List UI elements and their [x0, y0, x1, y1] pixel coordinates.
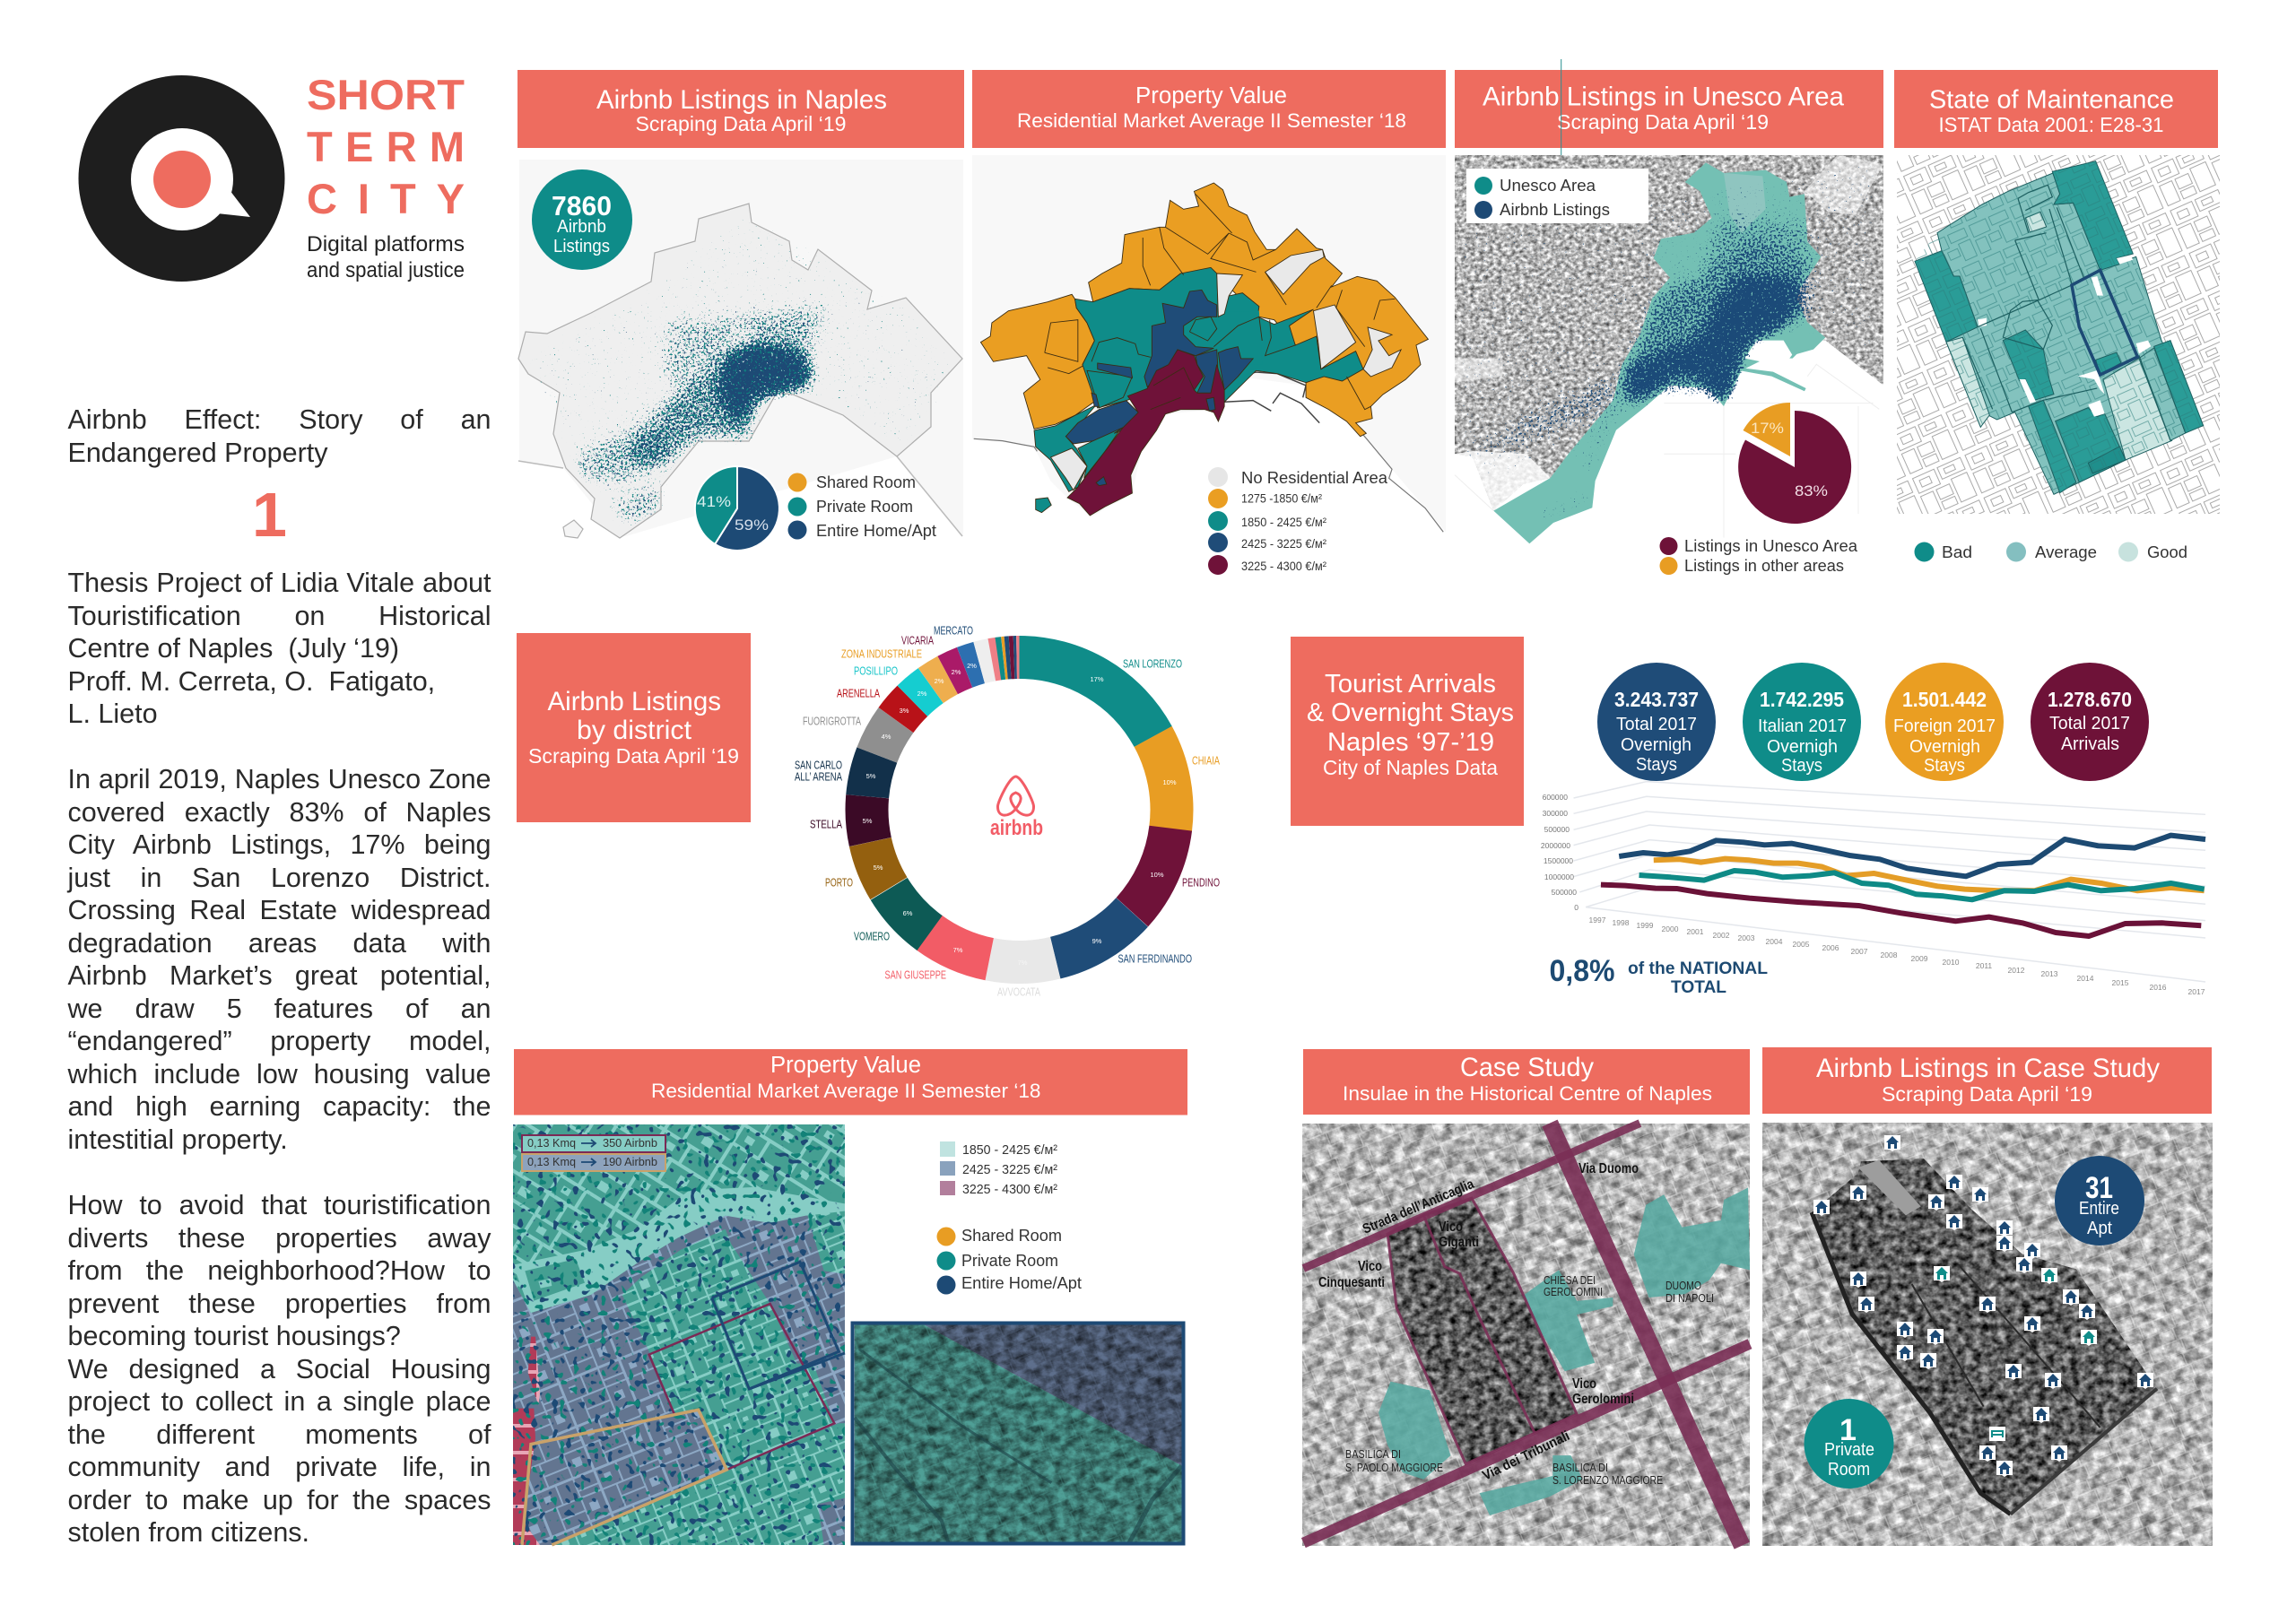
text block: research questions and project: stolen from citizens. [68, 1517, 309, 1548]
burgundy street overlays [1303, 1124, 1750, 1546]
donut percentages: 4% [882, 733, 891, 741]
icons: entire apartment markers [1813, 1135, 2153, 1477]
district boundary lines [1045, 195, 1395, 410]
legend box: Unesco area and Airbnb listings: Airbnb Listings [1500, 201, 1610, 219]
logo wordmark: Short Term City: CITY [307, 175, 465, 222]
panel header: Tourist Arrivals and Overnight Stays: City of Naples Data [1323, 756, 1498, 779]
panel header: Airbnb Listings in Naples: Airbnb Listings in Naples [596, 85, 887, 115]
donut district labels: STELLA [810, 818, 842, 830]
stat circle: Italian overnight stays: 1.742.295 [1760, 688, 1844, 711]
street names: Vico [1439, 1219, 1463, 1235]
donut percentages: 3% [900, 707, 909, 715]
map: state of maintenance [1897, 155, 2220, 561]
panel header: Airbnb Listings in Naples [517, 70, 964, 148]
donut percentages: 5% [866, 772, 876, 780]
legend: value bands: 3225 - 4300 €/м² [962, 1182, 1057, 1197]
chart x-axis years: 2012 [2008, 966, 2025, 975]
stat circle: Italian overnight stays: Overnigh [1767, 736, 1838, 757]
monument names: GEROLOMINI [1544, 1285, 1603, 1298]
density callouts: 350 Airbnb [603, 1137, 657, 1150]
pie chart: room types: 41% [697, 493, 731, 510]
legend: listings share: Listings in other areas [1684, 557, 1844, 575]
text block: research questions and project: becoming tourist housings? [68, 1321, 401, 1351]
street names [1318, 1161, 1639, 1484]
chart x-axis years: 2006 [1822, 943, 1839, 952]
panel header: Property Value: Residential Market Average II Semester ‘18 [1017, 109, 1406, 132]
donut percentages: 2% [952, 668, 961, 676]
donut percentages: 5% [874, 864, 883, 872]
chart x-axis years: 2011 [1976, 961, 1992, 970]
legend: value bands: 1850 - 2425 €/м² [962, 1142, 1057, 1158]
legend box: Unesco area and Airbnb listings: Unesco Area [1500, 177, 1596, 195]
street names: Cinquesanti [1318, 1275, 1385, 1290]
text block: research questions and project: order to make up for the spaces [68, 1485, 491, 1515]
inset: tinted aerial view [852, 1324, 1184, 1544]
panel header: Property Value detail: Residential Market Average II Semester ‘18 [651, 1080, 1040, 1102]
stat circle: 7860 listings: Airbnb [557, 217, 606, 237]
stat circle: 7860 listings [532, 169, 632, 270]
logo wordmark: Short Term City: SHORT [307, 71, 465, 118]
text block: thesis credits: Thesis Project of Lidia Vitale about [68, 568, 491, 598]
chart y-axis labels: 2000000 [1541, 841, 1570, 850]
callout: 0,8% of the national total [1550, 954, 1768, 997]
chart x-axis years: 2002 [1713, 931, 1730, 940]
panel header: Airbnb Listings by district [517, 633, 751, 822]
text block: project title: Endangered Property [68, 438, 327, 468]
stat circle: total arrivals: 1.278.670 [2048, 688, 2132, 711]
donut district labels: SAN GIUSEPPE [884, 968, 946, 981]
panel header: Tourist Arrivals and Overnight Stays: Tourist Arrivals [1325, 670, 1496, 699]
panel header: Airbnb Listings in Unesco Area: Airbnb Listings in Unesco Area [1483, 82, 1845, 111]
chart y-axis labels: 1000000 [1544, 872, 1574, 881]
text block: research questions and project: project to collect in a single place [68, 1386, 491, 1417]
legend: property value: 3225 - 4300 €/м² [1241, 560, 1326, 573]
chart x-axis years: 1998 [1613, 918, 1630, 927]
monument names: DI NAPOLI [1665, 1291, 1714, 1305]
logo wordmark: Short Term City: and spatial justice [307, 258, 465, 282]
street names: Giganti [1439, 1235, 1479, 1250]
pie chart: listings share [1738, 403, 1851, 524]
chart x-axis years: 2005 [1793, 940, 1810, 949]
callout: 0,8% of the national total: 0,8% [1550, 954, 1614, 988]
street names: Vico [1572, 1376, 1596, 1392]
monument names: BASILICA DI [1345, 1447, 1401, 1461]
donut district labels: VICARIA [901, 633, 934, 647]
text block: research questions and project: the different moments of [68, 1419, 491, 1449]
legend: maintenance state: Good [2147, 543, 2187, 561]
stat circle: 1 private room [1805, 1399, 1894, 1488]
donut percentages: 2% [967, 662, 977, 670]
text block: thesis credits: Touristification on Historical [68, 601, 491, 631]
donut percentages: 5% [863, 817, 873, 825]
donut percentages: 2% [918, 690, 927, 698]
scatter: navy entire home listings [518, 204, 962, 538]
panel header: Property Value [972, 70, 1446, 148]
callout: 0,8% of the national total: TOTAL [1671, 977, 1726, 997]
stat circle: foreign overnight stays: Foreign 2017 [1893, 716, 1996, 736]
panel header: Property Value: Property Value [1135, 83, 1287, 108]
text block: thesis credits: L. Lieto [68, 699, 158, 729]
chart x-axis years: 1997 [1589, 916, 1606, 924]
scatter: Airbnb listings density [1455, 155, 1883, 529]
donut percentages: 9% [1092, 937, 1102, 945]
chart x-axis years: 1999 [1637, 921, 1654, 930]
stat circle: foreign overnight stays: 1.501.442 [1902, 688, 1987, 711]
legend: property value: No Residential Area [1241, 469, 1388, 487]
chart x-axis years: 2014 [2077, 974, 2094, 983]
text block: thesis credits: Proff. M. Cerreta, O. Fatigato, [68, 665, 435, 696]
panel header: State of Maintenance: ISTAT Data 2001: E28-31 [1939, 113, 2163, 136]
chart x-axis years: 2009 [1911, 954, 1928, 963]
icon: airbnb logo: airbnb [990, 816, 1043, 840]
map: property value by zone [972, 155, 1446, 575]
chart y-axis labels: 500000 [1544, 825, 1570, 834]
stat circle: foreign overnight stays: Stays [1924, 755, 1965, 776]
donut district labels: MERCATO [934, 624, 973, 637]
donut district labels: SAN FERDINANDO [1118, 952, 1192, 965]
panel header: Airbnb Listings in Case Study: Scraping Data April ‘19 [1882, 1082, 2092, 1106]
chart y-axis labels: 0 [1574, 903, 1578, 912]
stat circle: total overnight stays: Stays [1636, 754, 1677, 775]
density callouts: 0,13 Kmq [527, 1156, 576, 1168]
legend: listings share [1659, 537, 1858, 575]
line chart: arrivals and overnight stays 1997-2017 [1541, 782, 2205, 996]
density callouts: 190 Airbnb [603, 1156, 657, 1168]
panel header: Airbnb Listings in Case Study [1762, 1047, 2212, 1114]
monument names: S. LORENZO MAGGIORE [1552, 1473, 1663, 1487]
density callouts [522, 1135, 665, 1171]
stat circle: 31 entire apartments: 31 [2085, 1171, 2113, 1205]
stat circle: foreign overnight stays: Overnigh [1909, 736, 1980, 757]
stat circle: 7860 listings: 7860 [552, 190, 612, 221]
panel header: Tourist Arrivals and Overnight Stays [1291, 637, 1524, 826]
text block: research questions and project [68, 1190, 491, 1548]
page number 1: 1 [252, 480, 287, 550]
donut district labels: SAN CARLO [795, 759, 842, 771]
donut percentages: 6% [903, 909, 913, 917]
callout: 0,8% of the national total: of the NATIONAL [1628, 959, 1768, 978]
chart x-axis years: 2015 [2112, 978, 2129, 987]
text block: research questions and project: community and private life, in [68, 1452, 491, 1482]
chart x-axis years: 2010 [1943, 958, 1960, 967]
legend: room types detail: Shared Room [961, 1227, 1062, 1245]
panel header: Airbnb Listings by district: by district [577, 716, 691, 745]
legend: room types detail: Entire Home/Apt [961, 1274, 1082, 1292]
donut district labels: SAN LORENZO [1123, 656, 1182, 671]
chart x-axis years: 2004 [1766, 937, 1783, 946]
teal monument buildings [1378, 1188, 1750, 1515]
logo wordmark: Short Term City: TERM [307, 123, 465, 170]
donut percentages: 2% [935, 677, 944, 685]
text block: research questions and project: diverts these properties away [68, 1223, 491, 1254]
map: listings in Unesco area [1455, 155, 1883, 575]
donut district labels: PORTO [825, 875, 853, 890]
map: detailed property value with listings [513, 1124, 845, 1545]
stat circle: total arrivals: Total 2017 [2049, 713, 2130, 733]
stat circle: total arrivals [2031, 663, 2149, 781]
legend: room types: Shared Room [816, 473, 916, 491]
map: Airbnb listings in Naples [518, 160, 963, 551]
text block: findings paragraph: Airbnb Market’s great potential, [68, 960, 491, 991]
legend: value bands: 2425 - 3225 €/м² [962, 1162, 1057, 1177]
stat circle: 1 private room: Private [1824, 1439, 1874, 1460]
chart x-axis years: 2008 [1881, 950, 1898, 959]
text block: findings paragraph: we draw 5 features of an [68, 994, 491, 1024]
donut percentages: 7% [953, 946, 963, 954]
text block: thesis credits: Centre of Naples (July ‘19) [68, 633, 399, 664]
donut district labels [795, 624, 1220, 999]
chart x-axis years: 2001 [1687, 927, 1704, 936]
monument names: BASILICA DI [1552, 1461, 1608, 1474]
donut district labels: PENDINO [1182, 875, 1220, 890]
donut district labels: ALL’ ARENA [795, 769, 842, 784]
chart x-axis years: 2000 [1662, 924, 1679, 933]
panel header: State of Maintenance: State of Maintenance [1929, 86, 2174, 115]
panel header: Airbnb Listings by district: Airbnb Listings [547, 687, 721, 716]
text block: findings paragraph: In april 2019, Naples Unesco Zone [68, 764, 491, 794]
panel header: Airbnb Listings in Naples: Scraping Data April ‘19 [635, 112, 847, 135]
donut percentages [863, 662, 1177, 967]
text block: findings paragraph: covered exactly 83% of Naples [68, 796, 491, 827]
pie chart: listings share: 83% [1795, 482, 1828, 499]
logo wordmark: Short Term City [307, 71, 465, 282]
text block: research questions and project: from the neighborhood?How to [68, 1255, 491, 1286]
legend: room types detail [936, 1227, 1082, 1295]
chart y-axis labels: 500000 [1552, 888, 1577, 897]
legend: property value: 2425 - 3225 €/м² [1241, 537, 1326, 551]
text block: findings paragraph: just in San Lorenzo District. [68, 863, 491, 893]
text block: project title: Airbnb Effect: Story of an [68, 404, 491, 435]
donut district labels: CHIAIA [1192, 753, 1220, 768]
stat circle: foreign overnight stays [1885, 663, 2004, 781]
donut district labels: AVVOCATA [997, 985, 1040, 999]
legend box: Unesco area and Airbnb listings [1466, 169, 1648, 223]
legend: maintenance state: Average [2035, 543, 2097, 561]
panel header: Case Study: Insulae in the Historical Centre of Naples [1343, 1082, 1712, 1105]
legend: property value [1208, 467, 1388, 575]
chart x-axis years: 2017 [2188, 987, 2205, 996]
stat circle: 31 entire apartments: Entire [2079, 1198, 2119, 1219]
stat circle: total overnight stays [1597, 663, 1716, 781]
stat circle: total overnight stays: 3.243.737 [1614, 688, 1699, 711]
text block: findings paragraph: City Airbnb Listings, 17% being [68, 829, 491, 860]
street names: Via Duomo [1578, 1161, 1639, 1176]
chart x-axis years: 2013 [2041, 969, 2058, 978]
text block: findings paragraph: and high earning capacity: the [68, 1091, 491, 1122]
chart x-axis years: 2016 [2150, 983, 2167, 992]
chart x-axis years: 2003 [1738, 933, 1755, 942]
chart y-axis labels: 300000 [1543, 809, 1568, 818]
panel header: Airbnb Listings in Unesco Area [1455, 70, 1883, 148]
study area outlines [522, 1262, 845, 1545]
text block: thesis credits [68, 568, 491, 729]
pie chart: room types: 59% [735, 516, 769, 534]
stat circle: total overnight stays: Overnigh [1621, 734, 1692, 755]
stat circle: 7860 listings: Listings [553, 237, 610, 256]
text block: findings paragraph: “endangered” property model, [68, 1026, 491, 1056]
panel header: State of Maintenance [1894, 70, 2218, 148]
text block: research questions and project: We designed a Social Housing [68, 1354, 491, 1384]
street names: Via dei Tribunali [1480, 1428, 1572, 1484]
donut percentages: 17% [1090, 675, 1104, 683]
chart x-axis years [1589, 916, 2205, 996]
panel header: Tourist Arrivals and Overnight Stays: & Overnight Stays [1307, 699, 1514, 727]
text block: project title [68, 404, 491, 468]
panel header: Airbnb Listings in Case Study: Airbnb Listings in Case Study [1816, 1054, 2160, 1083]
stat circle: 31 entire apartments: Apt [2087, 1218, 2112, 1238]
legend: room types [787, 473, 936, 540]
monument names: S. PAOLO MAGGIORE [1345, 1461, 1443, 1474]
panel header: Tourist Arrivals and Overnight Stays: Naples ‘97-’19 [1327, 728, 1494, 757]
text block: research questions and project: How to avoid that touristification [68, 1190, 491, 1220]
legend: room types: Entire Home/Apt [816, 522, 936, 540]
donut district labels: VOMERO [854, 929, 890, 943]
donut percentages: 10% [1150, 871, 1164, 879]
stat circle: Italian overnight stays: Italian 2017 [1758, 716, 1847, 736]
donut district labels: POSILLIPO [854, 664, 898, 678]
legend: property value: 1850 - 2425 €/м² [1241, 516, 1326, 529]
logo wordmark: Short Term City: Digital platforms [307, 232, 465, 256]
stat circle: total overnight stays: Total 2017 [1616, 714, 1697, 734]
legend: maintenance state: Bad [1942, 543, 1972, 561]
density callouts: 0,13 Kmq [527, 1137, 576, 1150]
donut district labels: FUORIGROTTA [803, 714, 861, 728]
stat circle: Italian overnight stays [1743, 663, 1861, 781]
panel header: Airbnb Listings by district: Scraping Data April ‘19 [528, 744, 739, 768]
logo: speech-bubble ring [79, 75, 285, 282]
donut district labels: ZONA INDUSTRIALE [841, 647, 922, 660]
panel header: Case Study: Case Study [1460, 1053, 1594, 1082]
stat circle: 1 private room: Room [1828, 1459, 1870, 1480]
icon: private room bed marker [1989, 1427, 2005, 1441]
monument names: CHIESA DEI [1544, 1273, 1596, 1287]
monument names [1345, 1273, 1714, 1487]
donut percentages: 7% [1018, 959, 1028, 967]
text block: findings paragraph: degradation areas data with [68, 927, 491, 958]
text block: findings paragraph: intestitial property. [68, 1124, 288, 1155]
panel header: Property Value detail [514, 1049, 1187, 1115]
stat circle: Italian overnight stays: Stays [1781, 755, 1822, 776]
stat circle: 31 entire apartments [2055, 1156, 2144, 1245]
street names: Vico [1358, 1259, 1382, 1274]
stat circle: 1 private room: 1 [1839, 1413, 1857, 1447]
legend: property value: 1275 -1850 €/м² [1241, 491, 1322, 506]
legend: room types: Private Room [816, 498, 913, 516]
panel header: Airbnb Listings in Unesco Area: Scraping Data April ‘19 [1557, 110, 1769, 134]
text block: findings paragraph [66, 764, 491, 1155]
legend: room types detail: Private Room [961, 1252, 1058, 1270]
chart y-axis labels [1541, 793, 1578, 912]
street names: Strada dell’Anticaglia [1361, 1176, 1476, 1237]
donut chart: listings by district [795, 595, 1235, 1025]
donut percentages: 10% [1162, 778, 1177, 786]
icon: airbnb logo [990, 777, 1043, 840]
scatter: teal private room listings [518, 204, 962, 538]
pie chart: room types [695, 466, 779, 551]
aerial map: case study insulae [1302, 1124, 1750, 1546]
pie chart: listings share: 17% [1751, 420, 1784, 437]
text block: findings paragraph: which include low housing value [68, 1058, 491, 1089]
chart y-axis labels: 600000 [1543, 793, 1568, 802]
aerial map: listings in case study [1762, 1123, 2213, 1546]
panel header: Property Value detail: Property Value [770, 1053, 921, 1078]
legend: maintenance state [1914, 542, 2187, 561]
donut district labels: ARENELLA [837, 687, 880, 699]
chart x-axis years: 2007 [1851, 947, 1868, 956]
panel header: Case Study [1303, 1049, 1750, 1115]
legend: value bands [940, 1141, 1057, 1197]
stat circle: total arrivals: Arrivals [2061, 733, 2119, 754]
text block: findings paragraph: Crossing Real Estate widespread [68, 895, 491, 925]
monument names: DUOMO [1665, 1279, 1701, 1292]
legend: listings share: Listings in Unesco Area [1684, 537, 1858, 555]
chart y-axis labels: 1500000 [1544, 856, 1573, 865]
text block: research questions and project: prevent these properties from [68, 1288, 491, 1318]
street names: Gerolomini [1572, 1392, 1634, 1407]
